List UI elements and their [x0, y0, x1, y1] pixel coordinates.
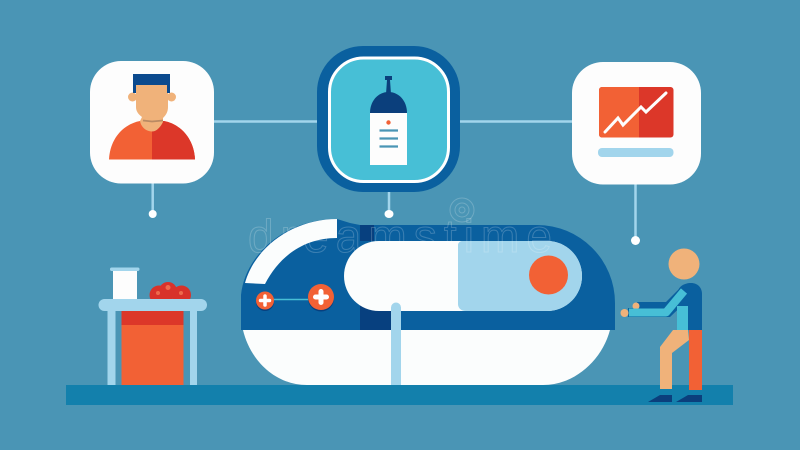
medical capsule: [241, 219, 615, 385]
icon: patient portrait: [109, 74, 195, 160]
legs: [660, 330, 702, 390]
card: patient: [90, 61, 214, 184]
torso: [678, 283, 702, 330]
patient bed: [344, 241, 582, 311]
person operating capsule: [620, 248, 702, 402]
orange indicator: [529, 256, 568, 294]
support post: [391, 302, 401, 385]
shoes: [648, 395, 702, 402]
icon: glass: [110, 268, 140, 300]
card: device: [317, 46, 460, 192]
back arm: [628, 286, 692, 317]
front arm: [620, 291, 684, 317]
watermark: dreamstime: [248, 210, 552, 262]
ground platform: [66, 385, 733, 405]
icon: tomatoes: [150, 282, 191, 304]
white arc panel: [245, 219, 337, 284]
capsule shell: [241, 219, 615, 330]
chart: rising line: [599, 87, 674, 138]
connector lines: [149, 122, 640, 245]
table with food: [98, 268, 207, 385]
card: chart: [572, 62, 701, 184]
head: [668, 248, 700, 280]
icon: device bottle: [370, 76, 407, 165]
control buttons: [256, 284, 334, 312]
capsule base: [243, 330, 610, 385]
